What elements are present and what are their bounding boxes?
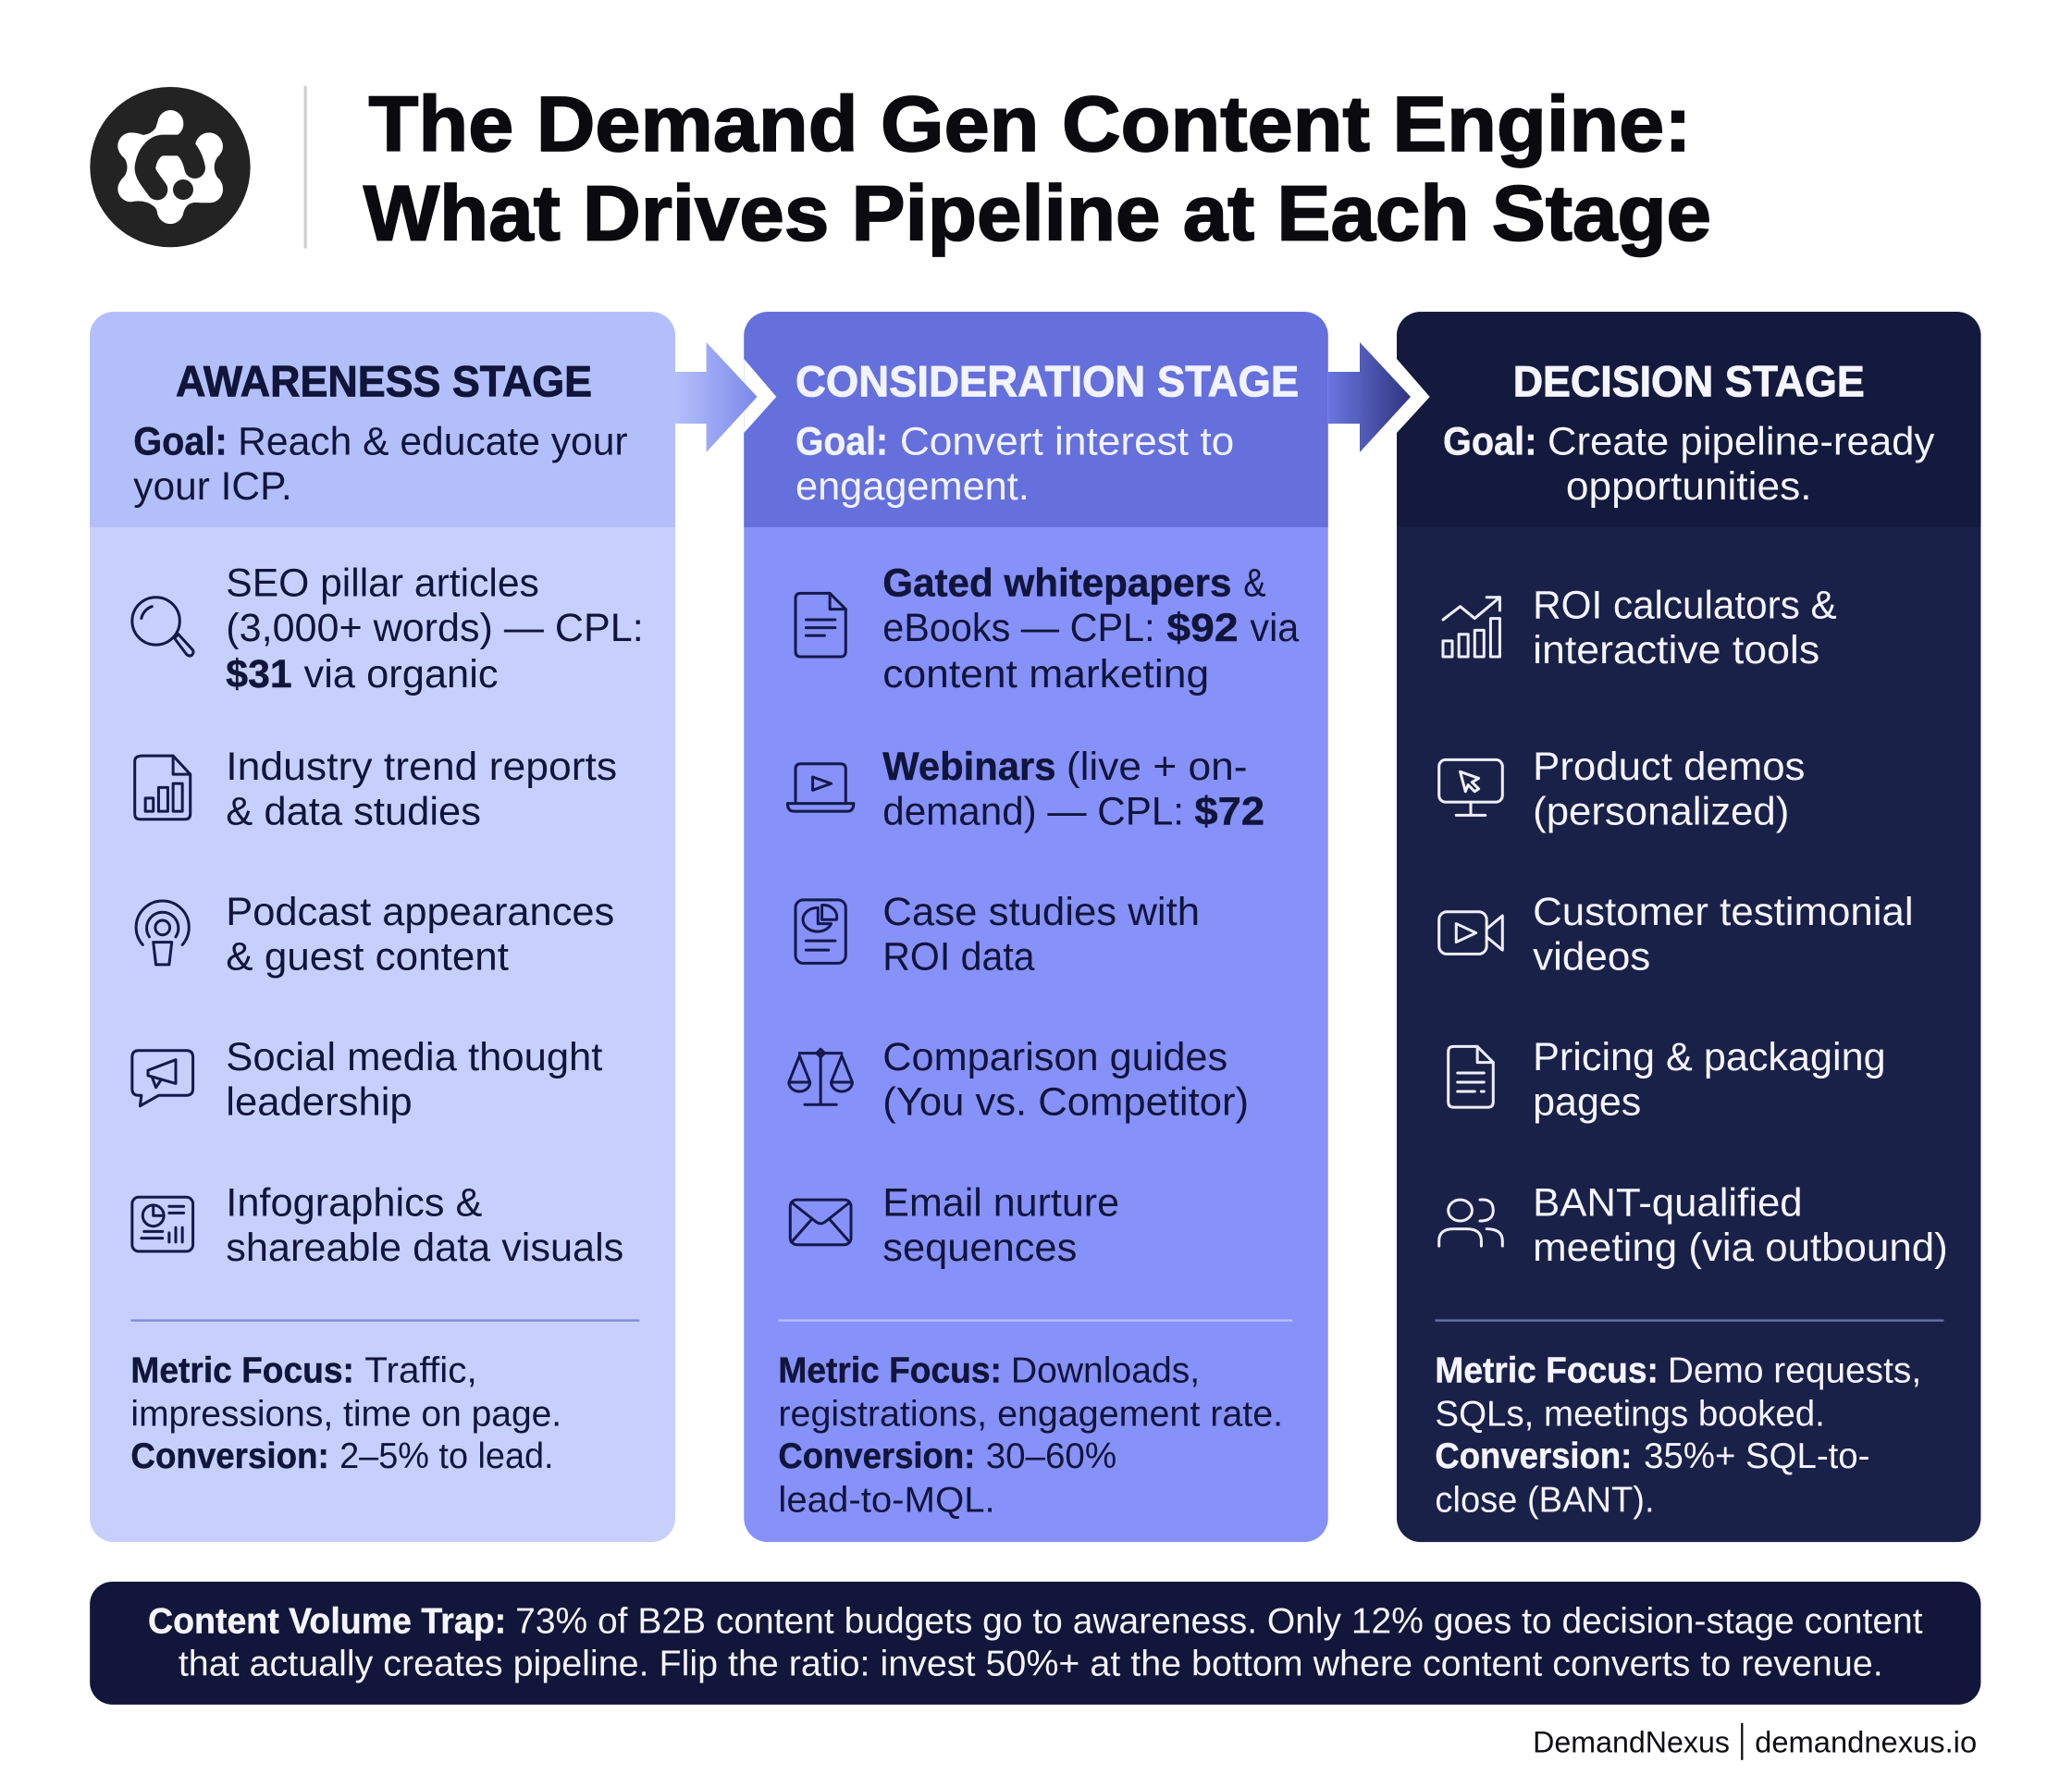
item: social media thought leadership: Social media thought <box>226 1035 603 1079</box>
icon: laptop with play button <box>787 764 854 811</box>
metric focus text: 2–5% to lead. <box>339 1436 554 1476</box>
metric focus text: Demo requests, <box>1668 1350 1921 1390</box>
item: email nurture <box>882 1180 1119 1270</box>
goal text: engagement. <box>796 464 1030 509</box>
metric focus text: Metric Focus: <box>1435 1350 1659 1390</box>
icon: envelope <box>790 1200 851 1245</box>
goal text <box>1443 419 1935 509</box>
item: gated whitepapers: content marketing <box>882 652 1209 696</box>
title: The Demand Gen Content Engine: <box>369 80 1692 167</box>
goal text: opportunities. <box>1566 464 1812 509</box>
metric focus text <box>1435 1350 1921 1520</box>
item: email nurture: sequences <box>882 1226 1077 1270</box>
icon: magnifying glass <box>132 598 193 656</box>
stage heading: DECISION STAGE <box>1513 357 1865 406</box>
goal text: Reach & educate your <box>238 419 628 463</box>
item: gated whitepapers: $92 <box>1166 606 1239 650</box>
header band <box>90 312 675 527</box>
metric focus text: Metric Focus: <box>778 1350 1002 1390</box>
icon: infographic card <box>132 1197 193 1251</box>
item: gated whitepapers: eBooks — CPL: <box>882 606 1155 650</box>
item: comparison guides <box>882 1035 1249 1125</box>
metric focus text: 30–60% <box>986 1436 1116 1476</box>
item: gated whitepapers: Gated whitepapers <box>882 561 1231 605</box>
item: BANT-qualified meeting: BANT-qualified <box>1533 1180 1803 1225</box>
item: comparison guides: (You vs. Competitor) <box>882 1080 1249 1125</box>
item: SEO pillar articles: $31 <box>226 652 292 696</box>
stage heading: CONSIDERATION STAGE <box>796 357 1299 406</box>
item: ROI calculators: interactive tools <box>1533 628 1819 672</box>
icon: pricing document <box>1449 1046 1493 1107</box>
icon: megaphone speech bubble <box>132 1051 193 1106</box>
item: BANT-qualified meeting: meeting (via outbound) <box>1533 1226 1948 1270</box>
goal text: Goal: <box>1443 419 1536 463</box>
panel: consideration stage <box>744 312 1328 1542</box>
callout: content volume trap: 73% of B2B content budgets go to awareness. Only 12% goes to decision-stage content <box>515 1602 1923 1642</box>
icon: balance scale <box>789 1049 852 1104</box>
footer credit <box>1533 1723 1977 1760</box>
item: gated whitepapers: via <box>1250 606 1299 650</box>
item: SEO pillar articles: (3,000+ words) — CPL: <box>226 606 644 650</box>
icon: document <box>796 593 845 657</box>
panel: awareness stage <box>90 312 675 1542</box>
item: podcast appearances: & guest content <box>226 935 509 980</box>
header band <box>1397 312 1980 527</box>
icon: video camera <box>1439 912 1502 954</box>
metric focus text: Metric Focus: <box>130 1350 354 1390</box>
item: webinars: Webinars <box>882 745 1055 789</box>
footer credit: demandnexus.io <box>1755 1724 1977 1758</box>
metric focus text: close (BANT). <box>1435 1479 1655 1520</box>
header divider <box>304 86 307 249</box>
item: social media thought leadership: leadership <box>226 1080 413 1125</box>
goal text: your ICP. <box>133 464 292 509</box>
item: ROI calculators: ROI calculators & <box>1533 584 1837 628</box>
goal text <box>796 419 1234 509</box>
item: infographics: Infographics & <box>226 1180 482 1225</box>
item: webinars: $72 <box>1194 789 1264 833</box>
metric focus text: SQLs, meetings booked. <box>1435 1393 1825 1434</box>
header band <box>744 312 1328 527</box>
item: customer testimonial <box>1533 890 1914 980</box>
icon: case study document <box>796 900 845 963</box>
item: case studies: Case studies with <box>882 890 1200 934</box>
panel: decision stage <box>1397 312 1980 1542</box>
metric focus text <box>130 1350 561 1476</box>
panel background <box>90 312 675 1542</box>
item: case studies <box>882 890 1200 980</box>
item: product demos: (personalized) <box>1533 789 1789 833</box>
item: SEO pillar articles: SEO pillar articles <box>226 561 539 605</box>
item: product demos <box>1533 745 1805 833</box>
metric focus text: lead-to-MQL. <box>778 1479 995 1520</box>
item: customer testimonial: videos <box>1533 935 1650 980</box>
item: gated whitepapers: & <box>1243 561 1266 605</box>
icon: rising bar chart <box>1443 598 1499 657</box>
item: industry trend reports: & data studies <box>226 789 481 833</box>
logo: molecular network in dark circle <box>90 87 251 247</box>
icon: report with bars <box>135 756 191 820</box>
item: BANT-qualified meeting <box>1533 1180 1948 1270</box>
arrow: consideration to decision <box>1328 342 1430 452</box>
callout: content volume trap: that actually creates pipeline. Flip the ratio: invest 50%+ at the bottom where content converts to revenue. <box>179 1644 1883 1683</box>
item: SEO pillar articles <box>226 561 644 696</box>
item: webinars: (live + on- <box>1067 745 1248 789</box>
callout: content volume trap: Content Volume Trap: <box>148 1602 506 1642</box>
item: podcast appearances <box>226 890 614 980</box>
title <box>364 80 1711 256</box>
item: pricing and packaging: Pricing & packaging <box>1533 1035 1886 1079</box>
goal text: Goal: <box>133 419 228 463</box>
item: product demos: Product demos <box>1533 745 1805 789</box>
item: ROI calculators <box>1533 584 1837 672</box>
metric focus text: 35%+ SQL-to- <box>1644 1436 1869 1476</box>
item: webinars <box>882 745 1264 833</box>
metric focus text: Traffic, <box>364 1350 477 1390</box>
goal text: Goal: <box>796 419 888 463</box>
metric focus text: impressions, time on page. <box>130 1393 561 1434</box>
item: customer testimonial: Customer testimonial <box>1533 890 1914 934</box>
goal text: Convert interest to <box>900 419 1234 463</box>
item: gated whitepapers <box>882 561 1299 696</box>
icon: people <box>1439 1200 1502 1246</box>
item: email nurture: Email nurture <box>882 1180 1119 1225</box>
item: industry trend reports: Industry trend reports <box>226 745 617 789</box>
goal text <box>133 419 628 509</box>
arrow: awareness to consideration <box>675 342 776 452</box>
metric focus text: Conversion: <box>1435 1436 1632 1476</box>
metric focus text: Conversion: <box>130 1436 329 1476</box>
item: pricing and packaging: pages <box>1533 1080 1641 1125</box>
item: podcast appearances: Podcast appearances <box>226 890 614 934</box>
item: SEO pillar articles: via organic <box>304 652 499 696</box>
item: case studies: ROI data <box>882 935 1035 980</box>
item: infographics: shareable data visuals <box>226 1226 623 1270</box>
stage heading: AWARENESS STAGE <box>176 357 592 406</box>
item: pricing and packaging <box>1533 1035 1886 1125</box>
item: social media thought leadership <box>226 1035 603 1125</box>
icon: monitor with cursor <box>1439 759 1502 815</box>
metric focus text: Conversion: <box>778 1436 975 1476</box>
panel background <box>744 312 1328 1542</box>
item: comparison guides: Comparison guides <box>882 1035 1227 1079</box>
goal text: Create pipeline-ready <box>1548 419 1935 463</box>
title: What Drives Pipeline at Each Stage <box>364 169 1711 256</box>
metric focus text: registrations, engagement rate. <box>778 1393 1283 1434</box>
callout: content volume trap <box>90 1582 1980 1705</box>
item: industry trend reports <box>226 745 617 833</box>
panel background <box>1397 312 1980 1542</box>
item: webinars: demand) — CPL: <box>882 789 1184 833</box>
footer credit: DemandNexus <box>1533 1724 1730 1758</box>
item: infographics <box>226 1180 623 1270</box>
icon: podcast <box>136 901 189 965</box>
metric focus text <box>778 1350 1283 1520</box>
metric focus text: Downloads, <box>1011 1350 1200 1390</box>
